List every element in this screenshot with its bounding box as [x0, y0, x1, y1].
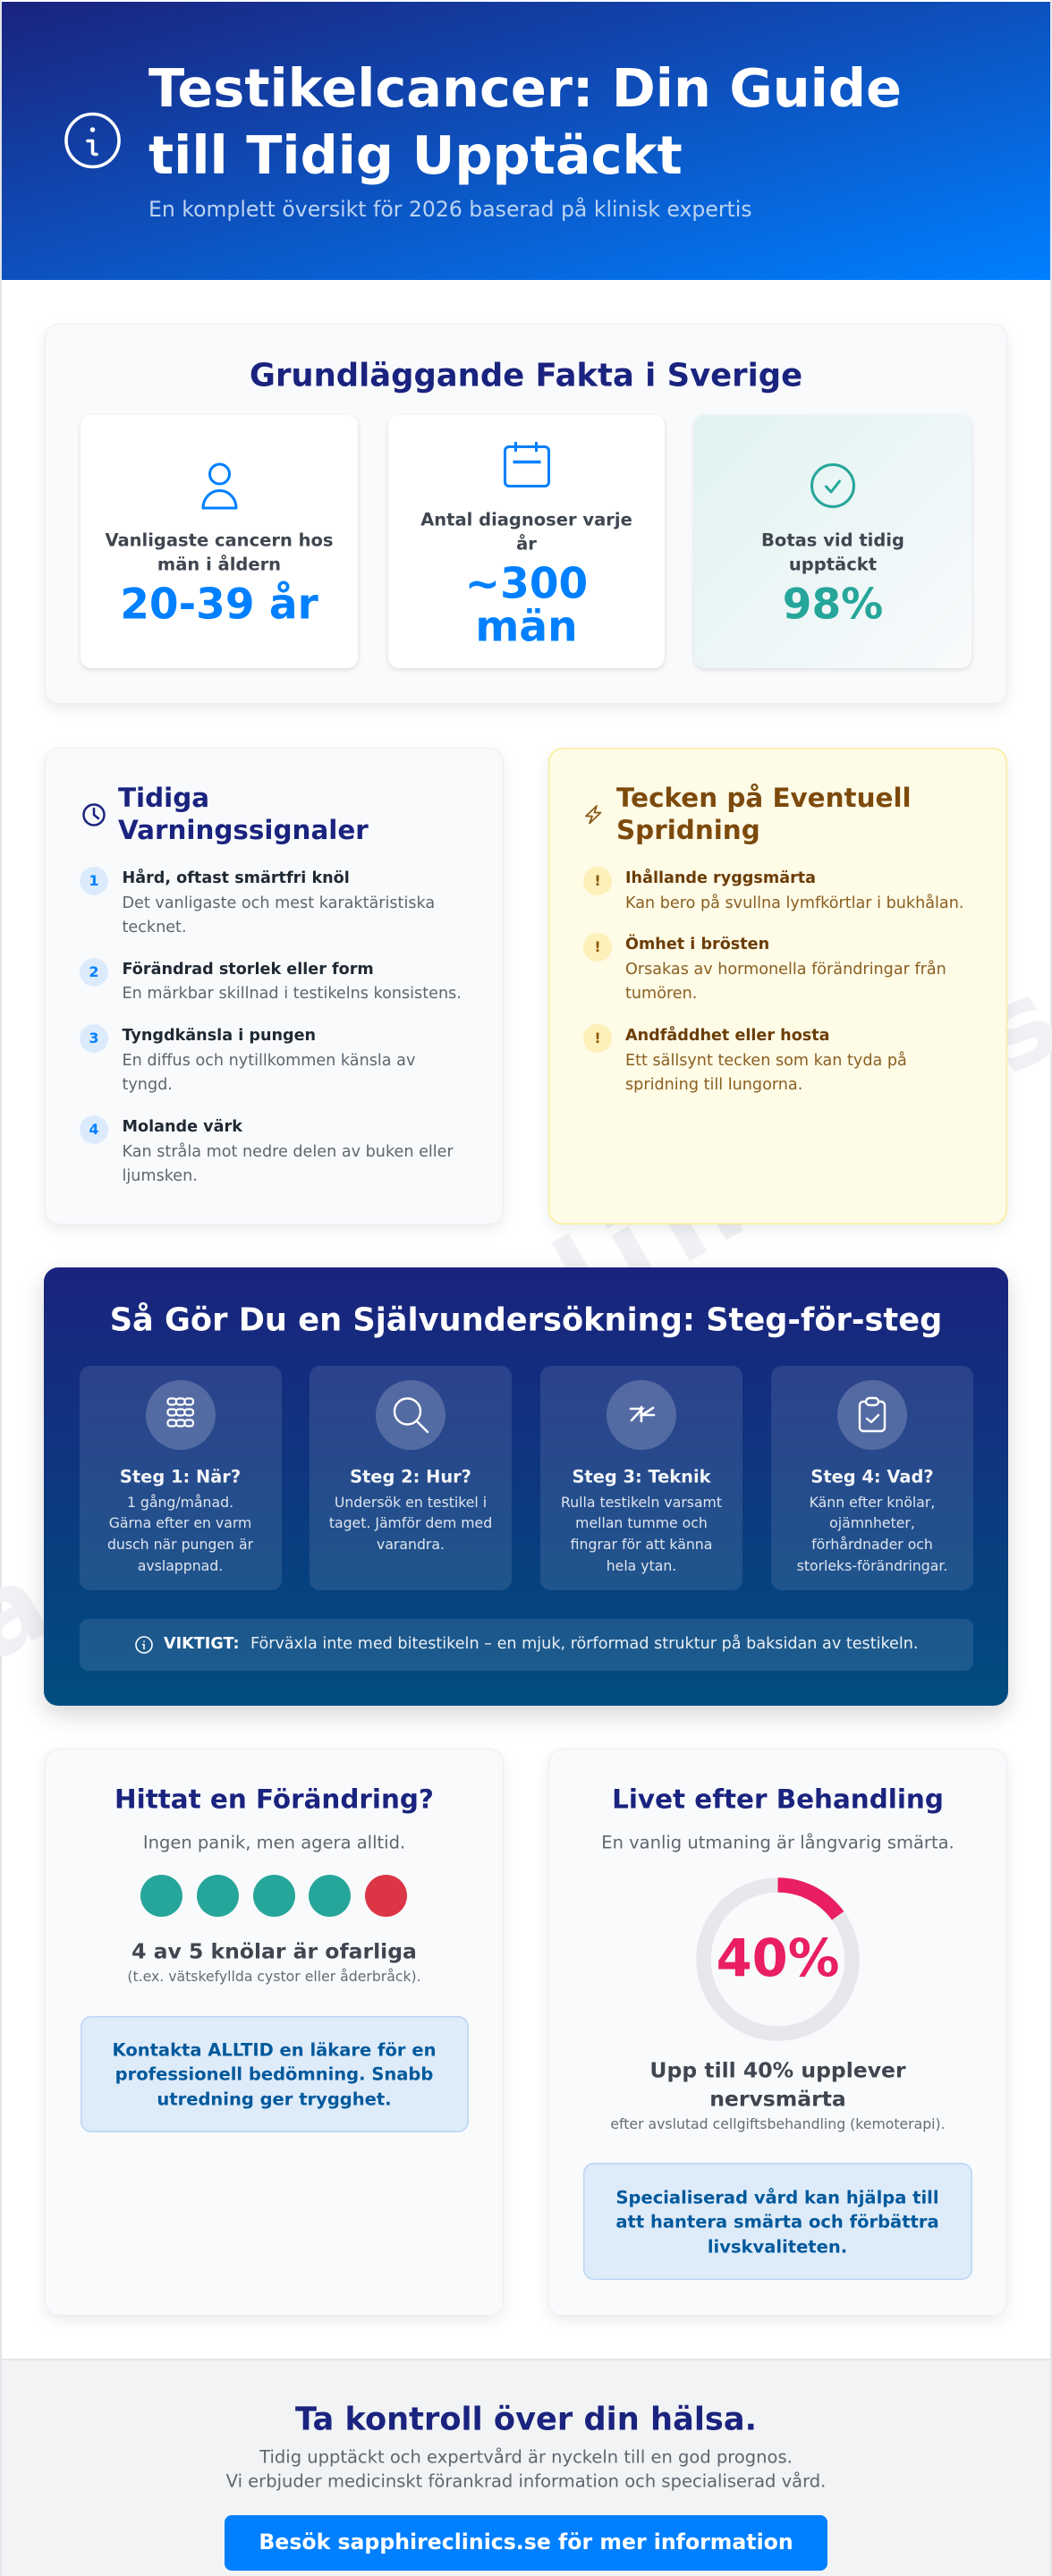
note label: VIKTIGT: — [164, 1635, 240, 1653]
badge: ! — [594, 938, 601, 955]
icon circle — [837, 1380, 907, 1450]
item text: Kan stråla mot nedre delen av buken eller — [122, 1143, 454, 1161]
heading — [616, 783, 912, 844]
list item 2 — [80, 958, 462, 1004]
badge 3: 3 — [89, 1030, 99, 1046]
item text: En diffus och nytillkommen känsla av — [122, 1052, 415, 1070]
badge: ! — [594, 1030, 601, 1046]
footer text line 2: Vi erbjuder medicinskt förankrad information och specialiserad vård. — [226, 2470, 826, 2491]
heading — [118, 783, 369, 844]
panel: found a change — [45, 1749, 504, 2316]
item title: Förändrad storlek eller form — [122, 961, 374, 979]
label: Vanligaste cancern hos — [105, 530, 334, 550]
item text line 2: tyngd. — [122, 1077, 173, 1095]
icon: info — [135, 1636, 153, 1654]
icon: person — [202, 463, 238, 510]
step text: storleks-förändringar. — [797, 1557, 947, 1574]
value: 98% — [783, 580, 883, 630]
item text line 2: ljumsken. — [122, 1168, 198, 1186]
badge 4: 4 — [89, 1121, 99, 1138]
label line 2: män i åldern — [157, 554, 281, 574]
panel: signs of spread — [548, 748, 1007, 1224]
step text: Gärna efter en varm — [109, 1514, 251, 1531]
footer — [2, 2359, 1050, 2576]
badge 2 — [80, 958, 108, 987]
button — [225, 2515, 827, 2571]
step text: Känn efter knölar, — [810, 1494, 935, 1511]
badge 1: 1 — [89, 872, 99, 889]
badge — [583, 933, 612, 962]
title — [148, 57, 902, 186]
heading: Så Gör Du en Självundersökning: Steg-för-steg — [110, 1301, 942, 1338]
step text: avslappnad. — [138, 1557, 223, 1574]
badge 4 — [80, 1115, 108, 1144]
item text: Orsakas av hormonella förändringar från — [625, 961, 946, 979]
step text: fingrar för att känna — [571, 1536, 712, 1553]
heading: Grundläggande Fakta i Sverige — [250, 357, 802, 394]
step text — [329, 1494, 492, 1553]
step 1 — [79, 1366, 281, 1590]
stat note: (t.ex. vätskefyllda cystor eller åderbråck). — [127, 1968, 421, 1985]
footer heading: Ta kontroll över din hälsa. — [295, 2401, 757, 2437]
step title: Steg 1: När? — [120, 1466, 241, 1487]
panel: life after treatment — [548, 1749, 1007, 2316]
icon circle — [607, 1380, 676, 1450]
dots: 4 of 5 — [140, 1875, 407, 1917]
step text: mellan tumme och — [575, 1514, 708, 1531]
heading: Tidiga — [118, 783, 209, 813]
title: Testikelcancer: Din Guide — [148, 57, 902, 119]
panel: basic facts — [45, 324, 1007, 704]
step text: förhårdnader och — [811, 1536, 933, 1553]
item title: Hård, oftast smärtfri knöl — [122, 869, 350, 887]
callout: Specialiserad vård kan hjälpa till — [615, 2187, 939, 2207]
step text: Rulla testikeln varsamt — [561, 1494, 722, 1511]
list item 2 — [583, 933, 946, 1004]
note: important — [79, 1619, 973, 1671]
badge 3 — [80, 1024, 108, 1053]
stat text: Upp till 40% upplever — [649, 2057, 906, 2082]
stat note: efter avslutad cellgiftsbehandling (kemoterapi). — [610, 2115, 946, 2132]
callout: Kontakta ALLTID en läkare för en — [113, 2039, 436, 2060]
item text line 2: tumören. — [625, 986, 697, 1004]
stat card: diagnoses — [388, 415, 665, 668]
stat text line 2: nervsmärta — [709, 2086, 846, 2111]
list item 3 — [80, 1024, 415, 1095]
title: till Tidig Upptäckt — [148, 124, 683, 186]
button: Besök sapphireclinics.se för mer information — [259, 2529, 793, 2555]
icon circle — [145, 1380, 215, 1450]
subheading: Ingen panik, men agera alltid. — [143, 1832, 405, 1852]
header banner — [2, 2, 1050, 280]
heading: Hittat en Förändring? — [115, 1784, 434, 1814]
ring value: 40% — [717, 1928, 839, 1988]
icon circle — [376, 1380, 445, 1450]
item text: Ett sällsynt tecken som kan tyda på — [625, 1052, 907, 1070]
badge: ! — [594, 872, 601, 889]
step text — [107, 1494, 254, 1574]
note text: Förväxla inte med bitestikeln – en mjuk, rörformad struktur på baksidan av testikeln. — [250, 1635, 919, 1653]
step text — [561, 1494, 722, 1574]
step text: hela ytan. — [607, 1557, 676, 1574]
stat card: age — [81, 415, 358, 668]
panel: self examination — [44, 1267, 1008, 1706]
value: 20-39 år — [120, 580, 318, 630]
step title: Steg 3: Teknik — [572, 1466, 711, 1487]
item title: Andfåddhet eller hosta — [625, 1028, 830, 1046]
value: ~300 — [465, 560, 588, 608]
callout — [81, 2016, 469, 2132]
icon: bolt — [585, 805, 601, 825]
step 2 — [310, 1366, 512, 1590]
value line 2: män — [475, 603, 578, 651]
callout: att hantera smärta och förbättra — [615, 2211, 939, 2232]
item title: Ihållande ryggsmärta — [625, 869, 816, 887]
list item 1 — [80, 867, 435, 936]
step title: Steg 2: Hur? — [350, 1466, 471, 1487]
label: Antal diagnoser varje — [420, 509, 632, 530]
label: Botas vid tidig — [761, 530, 904, 550]
step 4 — [771, 1366, 973, 1590]
subheading: En vanlig utmaning är långvarig smärta. — [601, 1832, 954, 1852]
step text: 1 gång/månad. — [127, 1494, 233, 1511]
step text: taget. Jämför dem med — [329, 1514, 492, 1531]
item title: Tyngdkänsla i pungen — [122, 1028, 316, 1046]
icon: calendar — [504, 442, 550, 487]
badge — [583, 1024, 612, 1053]
item title: Ömhet i brösten — [625, 936, 769, 954]
heading: Spridning — [616, 814, 760, 844]
icon: info — [64, 113, 121, 168]
list item 4 — [80, 1115, 454, 1186]
label line 2: år — [516, 533, 537, 554]
footer text: Tidig upptäckt och expertvård är nyckeln till en god prognos. — [259, 2446, 793, 2467]
stat text: 4 av 5 knölar är ofarliga — [132, 1938, 417, 1963]
item text line 2: tecknet. — [122, 919, 187, 936]
step text — [797, 1494, 947, 1574]
list item 3 — [583, 1024, 907, 1095]
chart: ring 40% — [696, 1877, 860, 2041]
heading: Tecken på Eventuell — [616, 783, 912, 813]
badge 2: 2 — [89, 963, 99, 980]
subtitle: En komplett översikt för 2026 baserad på klinisk expertis — [148, 197, 752, 222]
step text: varandra. — [377, 1536, 445, 1553]
step 3 — [540, 1366, 742, 1590]
step title: Steg 4: Vad? — [810, 1466, 934, 1487]
item text: En märkbar skillnad i testikelns konsistens. — [122, 986, 462, 1004]
heading: Livet efter Behandling — [612, 1784, 944, 1814]
badge — [583, 867, 612, 895]
callout: professionell bedömning. Snabb — [115, 2063, 433, 2084]
icon: check — [810, 463, 855, 508]
step text: dusch när pungen är — [107, 1536, 253, 1553]
step text: Undersök en testikel i — [335, 1494, 487, 1511]
step text: ojämnheter, — [829, 1514, 915, 1531]
stat card: cure rate — [694, 415, 971, 668]
callout: utredning ger trygghet. — [157, 2089, 392, 2109]
panel: early warning signs — [45, 748, 504, 1224]
item title: Molande värk — [122, 1119, 242, 1137]
item text: Det vanligaste och mest karaktäristiska — [122, 894, 435, 912]
item text line 2: spridning till lungorna. — [625, 1077, 802, 1095]
item text: Kan bero på svullna lymfkörtlar i bukhålan. — [625, 894, 963, 912]
icon: clock — [82, 803, 106, 826]
label line 2: upptäckt — [789, 554, 877, 574]
heading: Varningssignaler — [118, 814, 369, 844]
list item 1 — [583, 867, 963, 912]
callout: livskvaliteten. — [708, 2236, 847, 2257]
callout — [583, 2163, 972, 2280]
badge 1 — [80, 867, 108, 895]
